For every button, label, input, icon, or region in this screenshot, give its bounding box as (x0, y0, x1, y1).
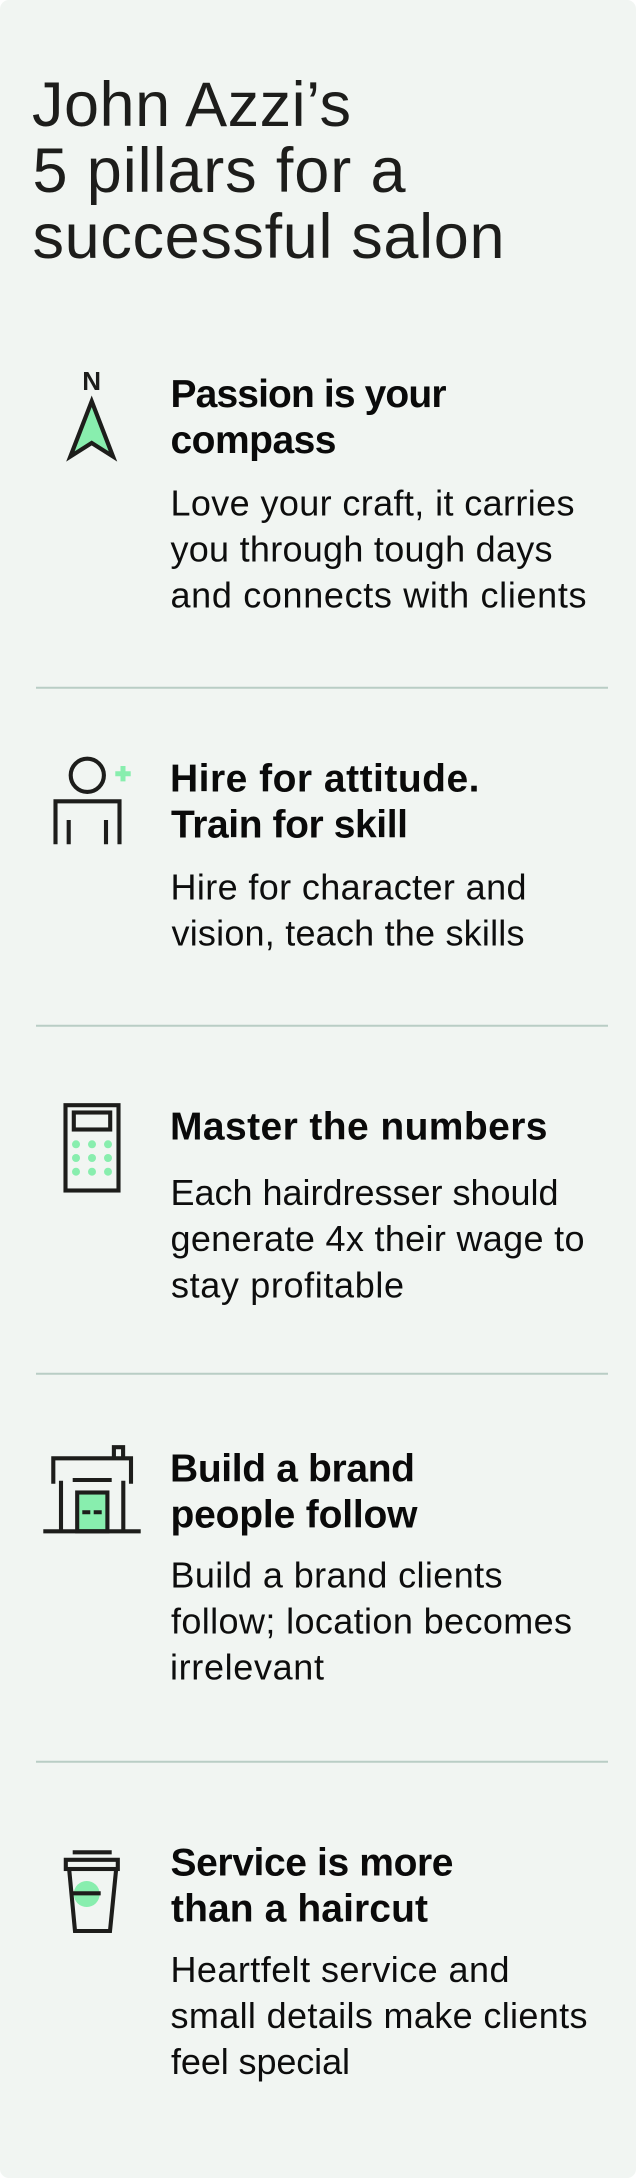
heading: passion: compass (170, 419, 336, 462)
icon: calculator (66, 1105, 118, 1190)
heading: brand (170, 1448, 418, 1537)
text: service: Heartfelt service and (170, 1949, 510, 1990)
heading: brand: people follow (170, 1494, 418, 1537)
heading: hire (170, 758, 480, 846)
icon: compass arrow: N (82, 366, 101, 396)
title: John Azzi’s (32, 70, 351, 140)
text: passion: you through tough days (170, 528, 552, 570)
panel: passion is your compass (70, 366, 586, 616)
text: brand: Build a brand clients (170, 1555, 502, 1596)
icon: salon storefront (43, 1447, 141, 1531)
text: hire: vision, teach the skills (172, 913, 524, 954)
panel: master the numbers (66, 1105, 584, 1305)
text: master: stay profitable (171, 1264, 404, 1305)
text: brand (170, 1555, 572, 1688)
heading: service: than a haircut (171, 1887, 428, 1930)
text: hire (170, 866, 526, 954)
text: service: small details make clients (170, 1995, 588, 2036)
text: service (170, 1949, 588, 2082)
text: brand: follow; location becomes (171, 1601, 572, 1642)
text: passion: and connects with clients (170, 574, 586, 616)
heading: passion (170, 373, 446, 462)
heading: master: Master the numbers (170, 1105, 548, 1148)
text: master: Each hairdresser should (170, 1172, 558, 1213)
heading: hire: Hire for attitude. (170, 758, 480, 801)
icon: person with plus (56, 759, 131, 844)
title (32, 70, 504, 272)
text: passion (170, 482, 586, 616)
heading: brand: Build a brand (170, 1448, 415, 1491)
panel: build a brand (43, 1447, 572, 1688)
text: brand: irrelevant (170, 1647, 324, 1688)
icon: coffee cup (66, 1852, 118, 1931)
heading: passion: Passion is your (170, 373, 446, 416)
text: passion: Love your craft, it carries (170, 482, 574, 524)
icon: compass arrow (70, 366, 113, 456)
title: 5 pillars for a (32, 136, 406, 206)
heading: hire: Train for skill (171, 804, 408, 846)
text: master (170, 1172, 584, 1305)
text: hire: Hire for character and (170, 866, 526, 908)
heading: service: Service is more (170, 1841, 454, 1884)
panel: service is more than a haircut (66, 1841, 588, 2082)
title: successful salon (32, 202, 504, 272)
heading: service (170, 1841, 454, 1930)
text: master: generate 4x their wage to (170, 1218, 584, 1259)
text: service: feel special (171, 2041, 350, 2082)
panel: hire for attitude (56, 758, 526, 954)
